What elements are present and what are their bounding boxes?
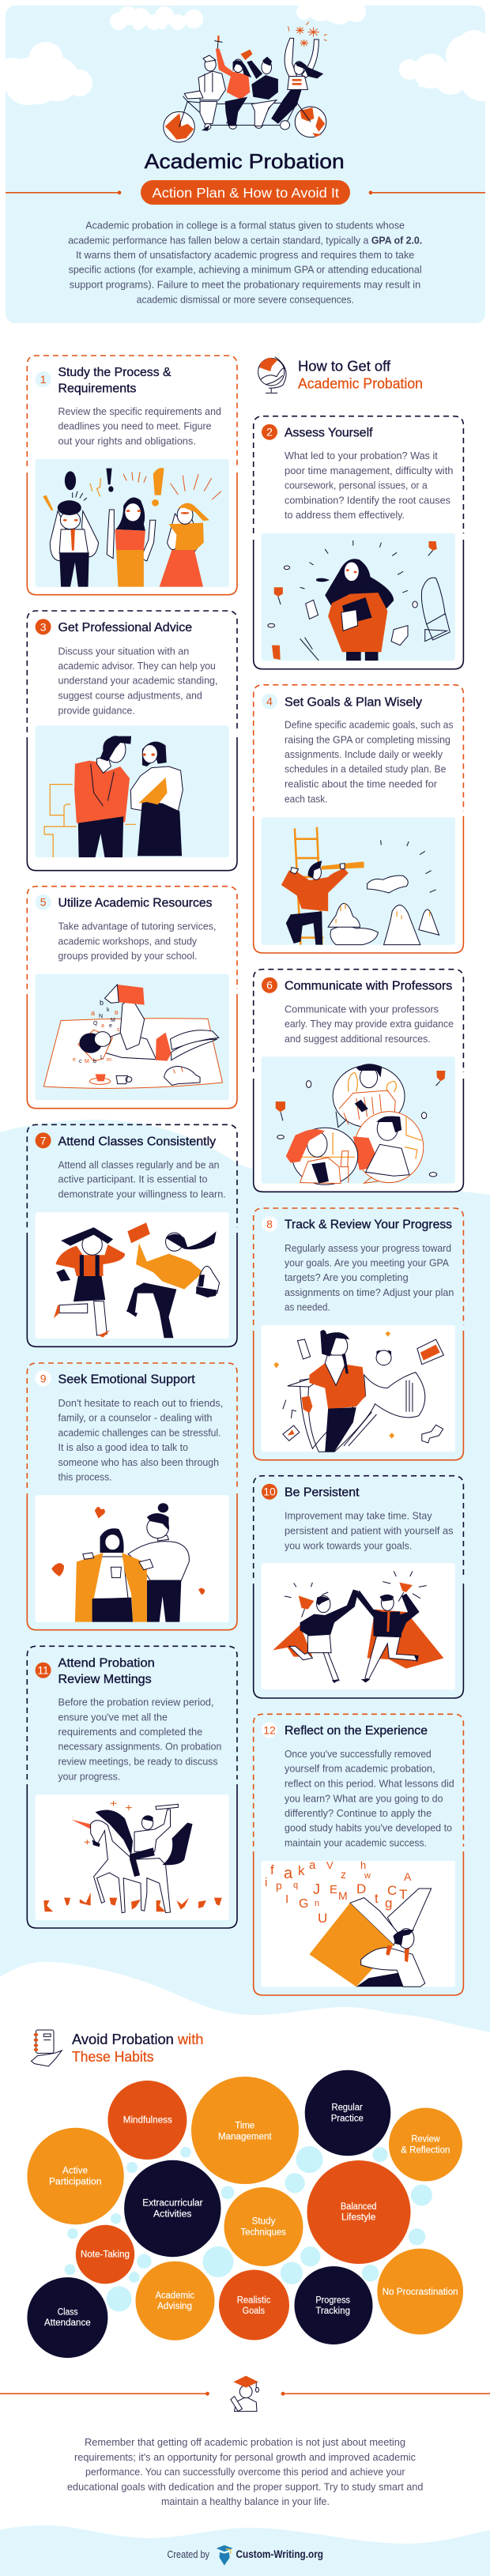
panel: step 4 [254,685,463,953]
bubble: time management [191,2077,299,2184]
bubble: study techniques [224,2187,303,2266]
step text: you learn? What are you going to do [285,1792,443,1804]
bubble: note-taking [76,2225,134,2284]
step text: provide guidance. [58,704,135,716]
heading: Avoid Probation with [72,2032,204,2047]
bubble: realistic goals: Goals [243,2307,265,2316]
step text [58,1158,226,1200]
bubble: realistic goals: Realistic [237,2295,271,2305]
number badge: 1 [40,373,47,386]
step text: academic advisor. They can help you [58,660,216,672]
bubble chart: habits [27,2070,463,2358]
footer credit [168,2545,323,2566]
flying letters: k [298,1863,305,1878]
step text: active participant. It is essential to [58,1173,207,1185]
panel: step 1 [27,356,237,595]
step text [285,1748,454,1848]
step text [285,450,454,521]
intro text: academic performance has fallen below a certain standard, typically a GPA of 2.0. [68,234,422,246]
illustration: three stressed students [36,459,229,587]
step text: reflect on this period. What lessons did [285,1777,454,1789]
flying letters: C [387,1883,397,1898]
bubble: class attendance: Class [58,2307,78,2317]
number badge [36,1132,51,1148]
step text: early. They may provide extra guidance [285,1018,454,1030]
step text: you work towards your goals. [285,1539,412,1551]
intro text: academic dismissal or more severe consequences. [137,293,354,305]
illustration: student with long to-do list [262,1325,455,1452]
step title: Set Goals & Plan Wisely [285,695,422,709]
icon: logo [217,2545,233,2566]
footer credit: Created by [168,2549,210,2560]
bubble: review and reflection [389,2108,462,2181]
step title: Attend Probation [58,1656,155,1670]
number badge [36,371,51,387]
flying letters: f [270,1862,274,1877]
falling letters: e [73,1057,76,1063]
woman right [168,514,184,550]
panel: step 8 [254,1208,463,1460]
bubble: active participation [27,2128,124,2224]
step title: Requirements [58,382,137,396]
bubble: no procrastination: No Procrastination [383,2288,458,2297]
bubble: note-taking: Note-Taking [81,2250,130,2259]
woman middle [115,498,145,531]
flying letters: V [326,1859,334,1871]
step text: Discuss your situation with an [58,645,189,657]
flying letters: z [341,1868,346,1881]
step title: Get Professional Advice [58,621,192,635]
step text: Before the probation review period, [58,1696,213,1708]
flying letters: A [404,1870,412,1883]
sparks [288,22,327,47]
intro text: support programs). Failure to meet the probationary requirements may result in [70,278,420,290]
background wave [0,1120,490,2032]
falling letters: e [109,1023,112,1029]
number badge [262,977,277,993]
step text: schedules in a detailed study plan. Be [285,763,446,775]
number badge: 7 [40,1134,47,1147]
flying letters: G [299,1897,308,1911]
falling letters: N [99,1014,103,1019]
illustration: book and flying letters [262,1859,455,1987]
step text [58,645,218,716]
flying letters: a [284,1865,293,1882]
step title: Review Mettings [58,1673,152,1686]
closing text: performance. You can successfully overcome this period and achieve your [85,2466,405,2478]
flying letters: M [338,1889,348,1902]
subtitle pill: Action Plan & How to Avoid It [152,185,339,201]
step text [285,1242,454,1312]
section heading: avoid probation with these habits [32,2030,203,2066]
step title: Seek Emotional Support [58,1373,195,1387]
step text: poor time management, difficulty with [285,465,454,476]
step text: this process. [58,1471,112,1482]
step text: review meetings, be ready to discuss [58,1755,218,1767]
bubble: balanced lifestyle [307,2160,411,2264]
bubble: academic advising: Advising [157,2302,192,2311]
panel: step 3 [27,611,237,871]
illustration: student and advisor [36,725,229,857]
step text: family, or a counselor - dealing with [58,1412,212,1424]
panel: hero [0,0,490,323]
panel: step 2 [254,416,463,669]
step text: Communicate with your professors [285,1004,439,1015]
step text: your goals. Are you meeting your GPA [285,1257,449,1269]
step text: Review the specific requirements and [58,405,221,417]
icon: globe [258,357,286,393]
step text: assignments on time? Adjust your plan [285,1286,454,1298]
panel: step 6 [254,970,463,1192]
bubble: progress tracking: Tracking [315,2307,350,2316]
step text: Improvement may take time. Stay [285,1510,432,1522]
footer wave [0,2525,490,2576]
flying letters: D [356,1881,366,1896]
man navy [247,61,278,100]
step title: Be Persistent [285,1486,360,1499]
falling letters: s [117,1027,120,1033]
step text: targets? Are you completing [285,1271,409,1283]
flying letters: g [385,1896,392,1911]
step text: yourself from academic probation, [285,1763,435,1775]
falling letters: Q [93,1021,98,1026]
flying letters: E [330,1883,337,1896]
step text: understand your academic standing, [58,675,218,687]
step text: differently? Continue to apply the [285,1807,432,1819]
bubble: mindfulness: Mindfulness [123,2116,172,2126]
step text: each task. [285,793,328,804]
subtitle pill [141,180,350,205]
icon: notebook in hand [32,2030,62,2066]
panel: step 10 [254,1476,463,1698]
number badge [262,1484,277,1500]
bubble: realistic goals [219,2269,289,2341]
bubble: balanced lifestyle: Balanced [341,2202,376,2212]
step title: Communicate with Professors [285,979,453,992]
number badge: 4 [266,695,273,708]
closing text: maintain a healthy balance in your life. [161,2495,330,2507]
flying letters: U [318,1911,327,1926]
closing text [67,2436,423,2507]
step text: Define specific academic goals, such as [285,719,454,731]
step text [58,1397,223,1482]
bubble: extracurricular activities: Activities [153,2209,192,2219]
panel: step 12 [254,1714,463,1995]
step text: Take advantage of tutoring services, [58,921,217,932]
step text: raising the GPA or completing missing [285,733,450,745]
falling letters: b [93,1059,96,1064]
panel: step 7 [27,1124,237,1346]
intro text: Academic probation in college is a formal status given to students whose [85,219,405,231]
bubble: study techniques: Techniques [240,2228,286,2237]
step text: your progress. [58,1770,120,1782]
bubble: review and reflection: & Reflection [401,2145,450,2155]
panel: step 5 [27,887,237,1109]
step text: suggest course adjustments, and [58,689,202,701]
step text [285,719,454,804]
bubble: time management: Management [218,2132,272,2141]
falling letters: M [85,1059,89,1064]
number badge: 5 [40,896,47,909]
illustration: video calls [262,1056,455,1184]
flying letters: J [313,1881,320,1897]
step text: coursework, personal issues, or a [285,480,428,491]
bubble: extracurricular activities: Extracurricular [142,2199,203,2209]
closing text: requirements; it's an opportunity for personal growth and improved academic [74,2451,416,2463]
bubble: class attendance [27,2277,107,2358]
step text [58,1696,221,1782]
step text: Regularly assess your progress toward [285,1242,451,1254]
step title: Reflect on the Experience [285,1724,428,1738]
number badge: 11 [37,1664,49,1677]
flying letters: w [364,1871,371,1881]
number badge: 3 [40,620,47,633]
bubble: regular practice: Regular [332,2103,363,2113]
small decorative bubbles [65,2146,432,2311]
falling letters: L [100,1055,104,1060]
illustration: student riding unicorn [36,1795,229,1920]
bubble: regular practice: Practice [331,2114,364,2123]
number badge [36,1370,51,1386]
panel: step 11 [27,1646,237,1928]
step title: Utilize Academic Resources [58,896,213,910]
bubble: regular practice [305,2070,390,2156]
divider lines [6,190,485,194]
flying letters: a [309,1859,316,1872]
falling letters [73,999,120,1064]
step title: Assess Yourself [285,426,373,439]
title: Academic Probation [145,149,345,173]
bubble: academic advising [136,2262,215,2341]
bottom divider with graduate icon [0,2376,490,2412]
heading accent: These Habits [72,2049,153,2065]
falling letters: a [101,1023,104,1029]
step title [58,1656,155,1686]
step text [285,1004,454,1045]
step text: assignments. Include daily or weekly [285,748,443,760]
clouds [0,0,490,105]
heading accent: Academic Probation [298,376,423,392]
number badge [36,1663,51,1678]
bubble: balanced lifestyle: Lifestyle [341,2213,375,2223]
illustration: friends on tandem bike [164,22,327,142]
number badge [262,1216,277,1232]
step text: out your rights and obligations. [58,435,196,446]
step text: It is also a good idea to talk to [58,1441,188,1453]
step text: What led to your probation? Was it [285,450,438,461]
closing text: educational goals with dedication and the proper support. Try to study smart and [67,2480,423,2492]
bubble: mindfulness [107,2081,187,2160]
bubble: progress tracking [294,2266,373,2344]
bubble: active participation: Participation [49,2177,101,2186]
section heading: how to get off academic probation [258,357,423,393]
step text: to address them effectively. [285,509,405,521]
step text: Don't hesitate to reach out to friends, [58,1397,223,1409]
bubble: no procrastination [377,2249,463,2334]
step text: maintain your academic success. [285,1836,427,1848]
flying letters: i [265,1876,267,1889]
bubble: review and reflection: Review [411,2135,440,2145]
flying letters: p [276,1879,282,1892]
step text: persistent and patient with yourself as [285,1525,454,1537]
flying letters: I [285,1892,288,1906]
illustration: reading on a picnic blanket [36,974,229,1100]
bubble: study techniques: Study [252,2217,276,2227]
step text: combination? Identify the root causes [285,494,450,506]
step text: realistic about the time needed for [285,778,438,790]
step text: demonstrate your willingness to learn. [58,1188,226,1200]
bubble: progress tracking: Progress [315,2295,350,2305]
step text: necessary assignments. On probation [58,1741,221,1753]
flying letters: h [360,1859,366,1871]
falling letters: m [107,1057,111,1063]
number badge: 8 [266,1218,273,1230]
icon: graduate [231,2376,258,2412]
flying letters: t [375,1891,379,1906]
step title: Attend Classes Consistently [58,1135,216,1148]
number badge [262,424,277,440]
step text: deadlines you need to meet. Figure [58,420,212,432]
step text: Once you've successfully removed [285,1748,432,1760]
falling letters: B [115,1011,119,1016]
intro text [68,219,422,305]
number badge: 10 [263,1486,276,1498]
step text [285,1510,454,1551]
illustration: superheroes high five [262,1563,455,1689]
step title [58,366,172,396]
step text: requirements and completed the [58,1726,202,1738]
falling letters: a [91,1009,95,1017]
step text: as needed. [285,1301,330,1312]
woman orange [216,49,250,100]
flying letters [265,1859,412,1926]
bubble: active participation: Active [62,2167,88,2176]
step title: Study the Process & [58,366,172,379]
step text: good study habits you've developed to [285,1822,452,1834]
illustration: thoughtful student with books [262,533,455,661]
step text: academic workshops, and study [58,935,198,947]
step text [58,405,221,446]
number badge: 6 [266,979,273,992]
step text: ensure you've met all the [58,1711,168,1723]
number badge: 12 [263,1723,276,1736]
closing text: Remember that getting off academic probation is not just about meeting [85,2436,405,2448]
intro text: specific actions (for example, achieving a minimum GPA or attending educational [69,264,422,276]
falling letters: k [107,1007,110,1013]
flying letters: q [293,1881,298,1890]
panel: step 9 [27,1363,237,1630]
footer credit: Custom-Writing.org [236,2548,323,2560]
illustration: friends comforting [36,1495,229,1622]
number badge: 2 [266,426,273,439]
step text: academic challenges can be stressful. [58,1426,221,1438]
number badge [262,694,277,710]
step text: someone who has also been through [58,1456,219,1468]
falling letters: c [79,1059,82,1064]
bubble: extracurricular activities [124,2160,221,2257]
illustration: two students with books [36,1212,229,1339]
intro text: It warns them of unsatisfactory academic progress and requires them to take [76,249,414,261]
step text: groups provided by your school. [58,950,198,962]
number badge [262,1722,277,1738]
step text: and suggest additional resources. [285,1033,431,1045]
bubble: class attendance: Attendance [44,2318,91,2328]
falling letters: M [111,1018,115,1023]
number badge: 9 [40,1372,47,1384]
step title: Track & Review Your Progress [285,1218,452,1231]
bubble: academic advising: Academic [155,2291,194,2300]
number badge [36,619,51,635]
step text [58,921,217,962]
woman arms up [285,38,297,77]
illustration: student with telescope on ladder [262,817,455,945]
bubble: time management: Time [235,2122,254,2131]
man [200,101,217,124]
flying letters: T [399,1887,407,1902]
step text: Attend all classes regularly and be an [58,1158,220,1170]
heading: How to Get off [298,358,391,374]
falling letters: b [100,999,104,1007]
flying letters: n [315,1899,319,1908]
number badge [36,894,51,910]
